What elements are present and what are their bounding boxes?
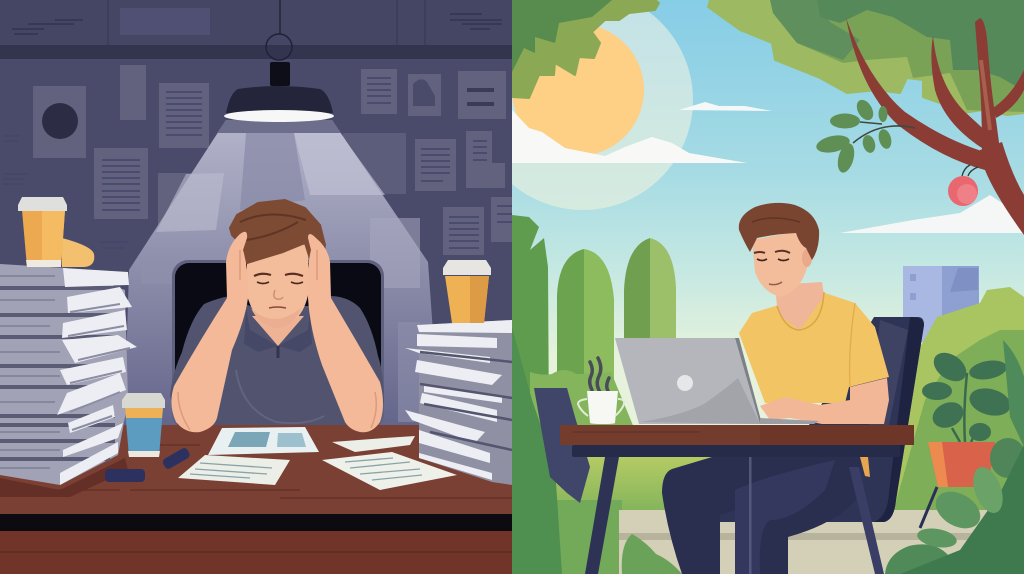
right paper stack [405, 320, 512, 485]
desk [0, 425, 512, 574]
hanging apple [948, 165, 978, 206]
right background bush [890, 287, 1024, 512]
coffee cup on left stack [18, 197, 94, 267]
cloud near apple [840, 195, 1024, 233]
stressed man head and arms [171, 200, 383, 432]
neck [252, 316, 304, 346]
lamp light cone [124, 120, 440, 430]
cloud under sun [512, 110, 747, 163]
garden hedges [512, 215, 676, 440]
sun halo [512, 12, 693, 210]
papers on desk [178, 427, 457, 490]
small cloud [679, 102, 772, 111]
leaves [815, 97, 893, 174]
arm and hand [760, 378, 889, 424]
stack shadow on desk [0, 458, 128, 497]
panel: relaxed outdoor scene [473, 0, 1024, 574]
inner bush [893, 330, 1024, 512]
cone detail shapes [141, 120, 420, 422]
laptop [615, 338, 819, 424]
face [247, 245, 308, 319]
face [752, 230, 807, 297]
trousers [662, 457, 862, 574]
ceiling band [0, 0, 512, 59]
desk lamp [224, 0, 334, 122]
garden ground behind [540, 440, 1024, 512]
coffee cup [578, 391, 624, 424]
neck [775, 282, 824, 330]
left forearm and hand [171, 232, 248, 432]
right foreground leaves [885, 340, 1024, 574]
paper lines [102, 77, 512, 249]
potted plant [920, 347, 1014, 528]
distant building [903, 266, 979, 342]
shirt [739, 292, 889, 403]
collar [244, 308, 312, 352]
relaxed man [662, 203, 889, 574]
stressed man torso [170, 296, 384, 434]
tree trunk and branches [846, 18, 1024, 235]
outdoor table [560, 425, 914, 574]
brows, eyes, nose, mouth [254, 274, 303, 276]
coffee cup on right stack [443, 260, 491, 323]
empty chair left [534, 388, 590, 503]
laptop chair [719, 317, 924, 522]
arm shading [178, 250, 376, 430]
photo on poster [413, 79, 435, 106]
steam [590, 358, 609, 392]
panel: stressed office scene [0, 0, 512, 574]
hair [230, 200, 325, 265]
brows, eyes, mouth [754, 251, 790, 253]
left paper stack [0, 264, 137, 485]
garden path [619, 510, 1024, 574]
leaf twig [853, 122, 915, 143]
tree foliage top right [708, 0, 1024, 115]
office chair [172, 260, 384, 430]
right forearm and hand [307, 234, 383, 432]
left foreground foliage [512, 327, 562, 574]
hair [739, 203, 819, 260]
shirt tail [860, 457, 870, 477]
wall papers [33, 65, 512, 255]
blue coffee cup on desk [122, 393, 165, 457]
thick poster lines [467, 90, 494, 104]
sky [512, 0, 1024, 425]
green base lower left [512, 500, 622, 574]
phone and eraser on desk [105, 447, 191, 482]
office wall [0, 59, 512, 425]
tree foliage top left [512, 0, 659, 98]
foliage near table [622, 534, 682, 574]
sun [512, 24, 644, 156]
